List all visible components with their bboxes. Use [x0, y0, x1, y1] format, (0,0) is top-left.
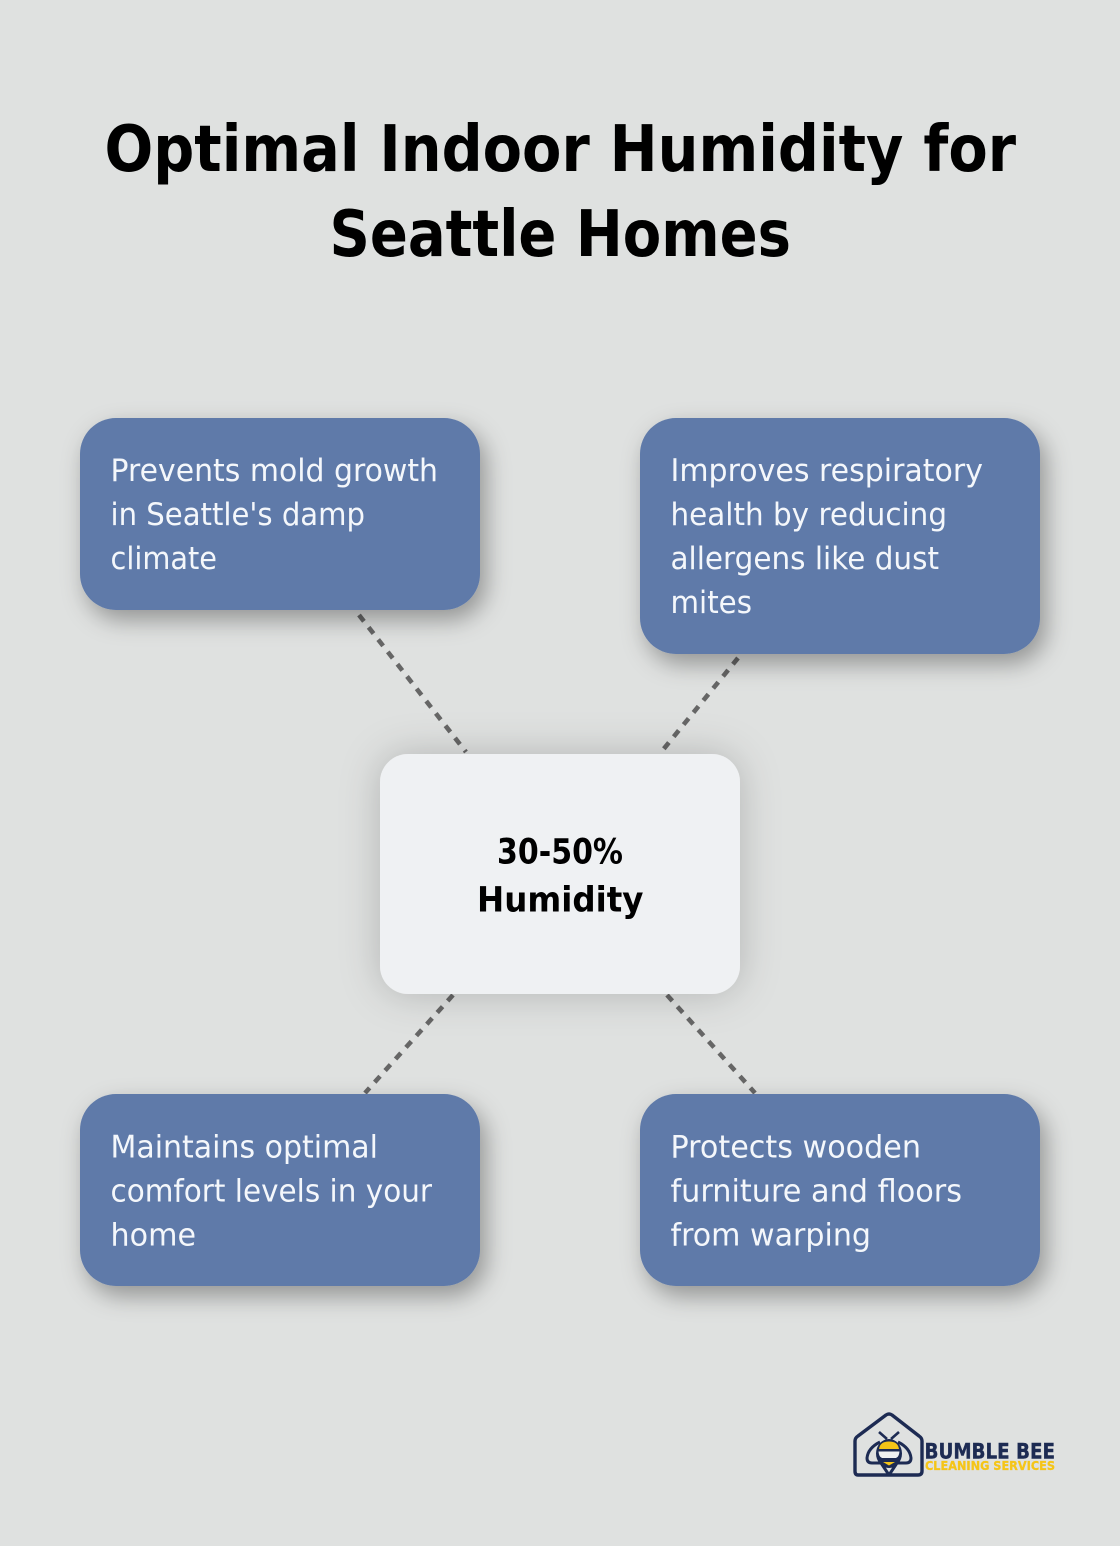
panel: center humidity: 30-50% — [497, 832, 623, 872]
panel: center humidity — [380, 754, 740, 994]
panel: center humidity: Humidity — [477, 880, 644, 920]
panel: wooden furniture: furniture and floors — [670, 1174, 962, 1210]
title — [104, 113, 1016, 272]
connector: bottom right — [667, 995, 755, 1093]
title: Seattle Homes — [330, 198, 791, 272]
panel: comfort levels: comfort levels in your — [110, 1174, 432, 1210]
panel: prevents mold: climate — [110, 541, 217, 577]
panel: prevents mold: in Seattle's damp — [110, 497, 365, 533]
panel: prevents mold — [80, 418, 480, 610]
icon: house outline — [855, 1414, 922, 1475]
panel: respiratory health: mites — [670, 585, 752, 621]
panel: respiratory health — [640, 418, 1040, 654]
panel: respiratory health: allergens like dust — [670, 541, 939, 577]
logo tagline: CLEANING SERVICES — [925, 1459, 1055, 1473]
title: Optimal Indoor Humidity for — [104, 113, 1016, 187]
panel: comfort levels: Maintains optimal — [110, 1130, 378, 1166]
logo wordmark: BUMBLE BEE — [924, 1440, 1055, 1464]
logo — [855, 1414, 1055, 1475]
panel: respiratory health: health by reducing — [670, 497, 947, 533]
panel: wooden furniture — [640, 1094, 1040, 1286]
connector: top left — [359, 615, 466, 752]
icon: bee — [867, 1432, 911, 1475]
panel: prevents mold: Prevents mold growth — [110, 453, 438, 489]
connector: bottom left — [365, 995, 453, 1093]
panel: comfort levels — [80, 1094, 480, 1286]
connector: top right — [662, 658, 738, 751]
panel: wooden furniture: Protects wooden — [670, 1130, 921, 1166]
panel: wooden furniture: from warping — [670, 1218, 871, 1254]
panel: respiratory health: Improves respiratory — [670, 453, 983, 489]
panel: comfort levels: home — [110, 1218, 196, 1254]
